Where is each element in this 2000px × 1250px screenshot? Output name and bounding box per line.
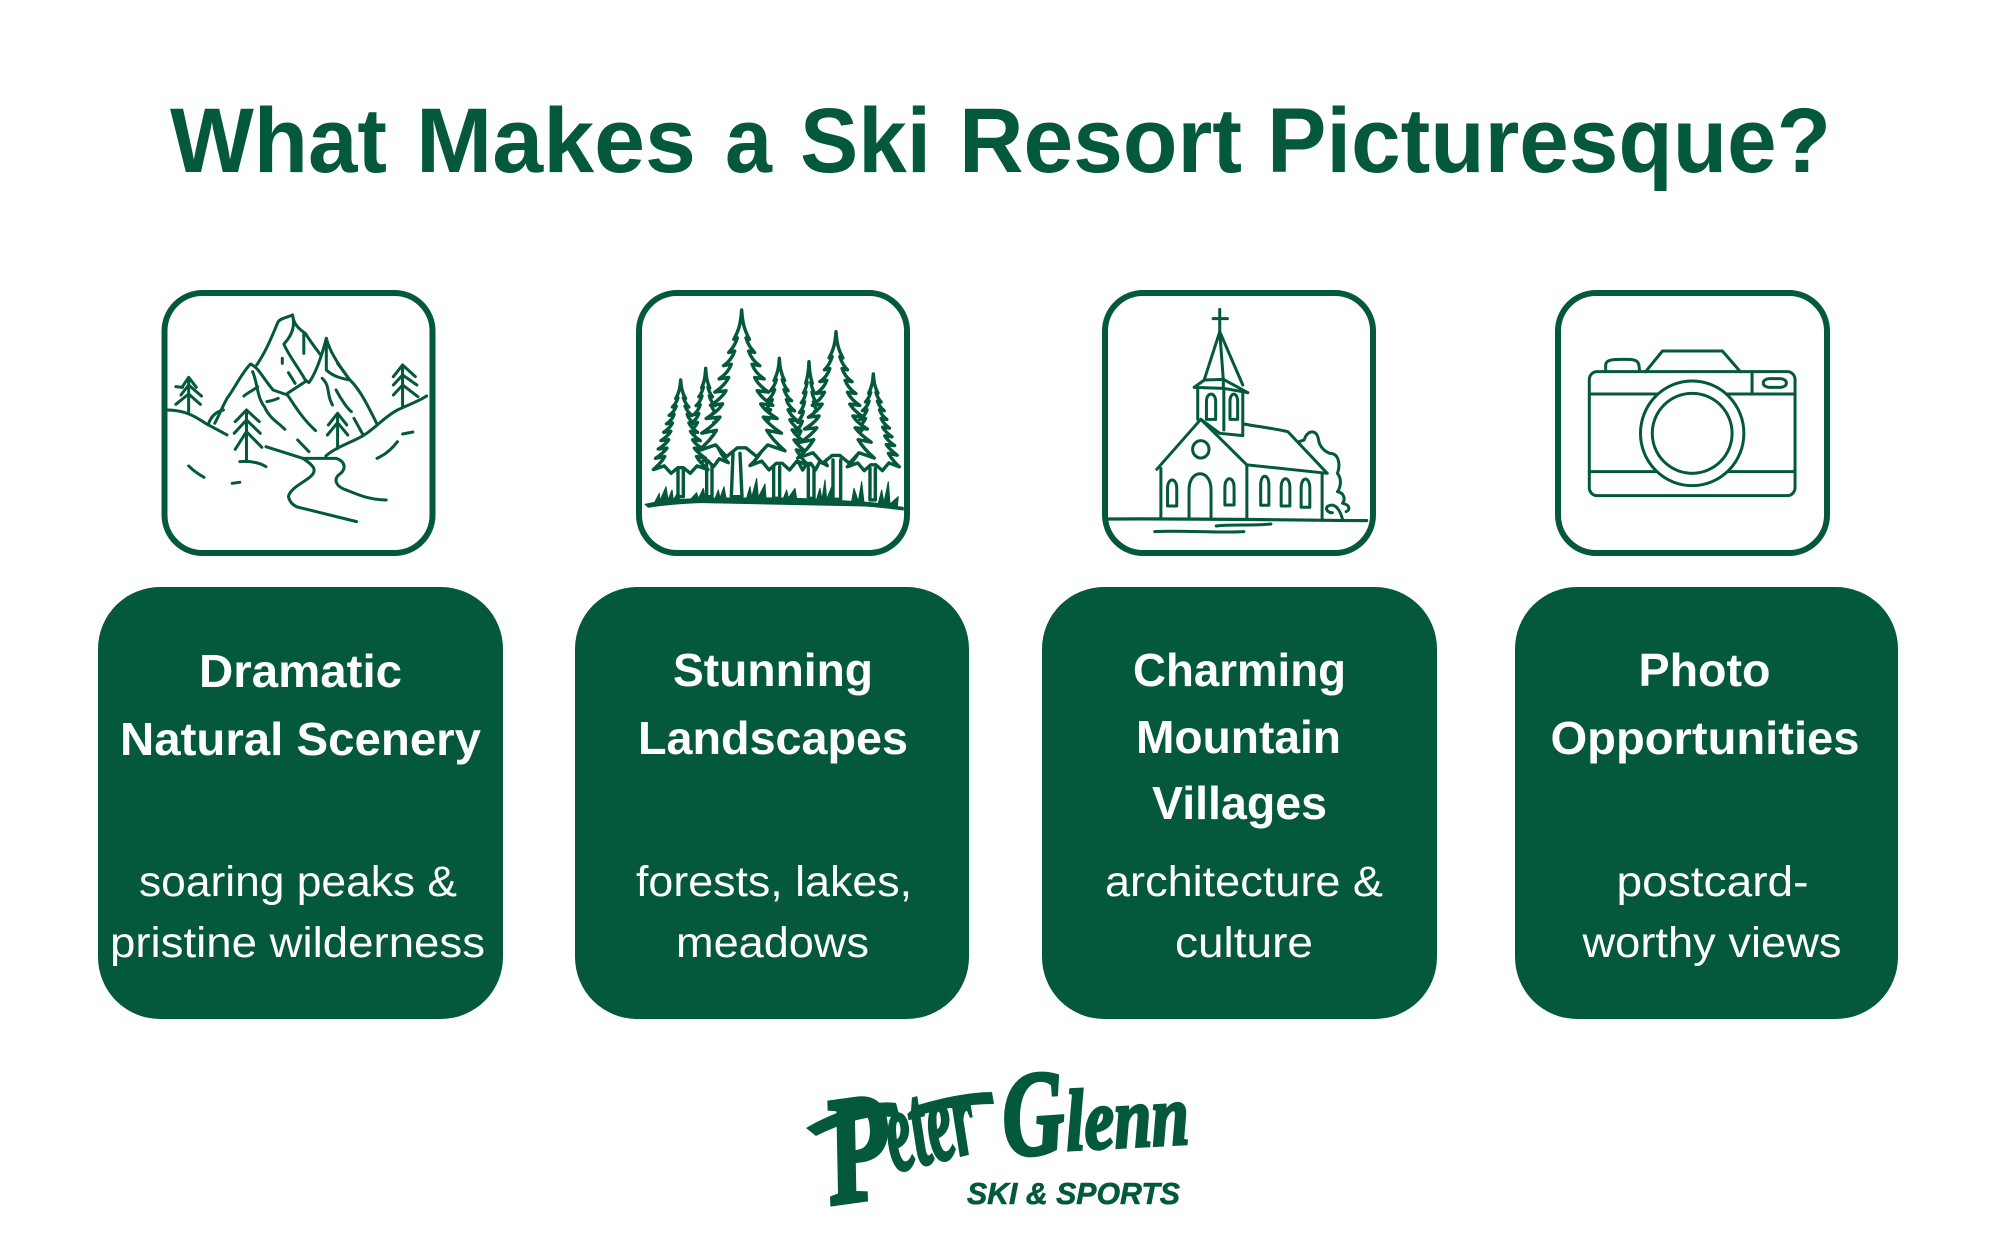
- title: a: [725, 90, 773, 192]
- panel: photo opportunities card: [1515, 587, 1898, 1019]
- panel: stunning landscapes card: Stunning: [673, 644, 873, 696]
- panel: charming mountain villages card: Mountain: [1136, 711, 1341, 763]
- panel: photo opportunities card: Photo: [1638, 644, 1770, 696]
- panel: dramatic natural scenery card: [98, 587, 503, 1019]
- panel: photo opportunities card: postcard-: [1616, 858, 1808, 906]
- panel: dramatic natural scenery card: Natural Scenery: [120, 713, 481, 765]
- panel: stunning landscapes card: [575, 587, 969, 1019]
- panel: photo opportunities card: worthy views: [1581, 919, 1842, 967]
- panel: stunning landscapes card: meadows: [676, 919, 869, 967]
- title: [170, 90, 1831, 192]
- panel: photo opportunities icon: [1558, 293, 1827, 553]
- logo: Peter Glenn Ski & Sports: lenn: [1063, 1067, 1191, 1169]
- panel: stunning landscapes card: Landscapes: [638, 712, 908, 764]
- title: Ski: [800, 90, 931, 192]
- logo: Peter Glenn Ski & Sports: P: [812, 1061, 902, 1238]
- panel: stunning landscapes icon: [639, 293, 907, 553]
- panel: charming mountain villages icon: [1105, 293, 1373, 553]
- panel: dramatic natural scenery card: Dramatic: [199, 645, 402, 697]
- logo: Peter Glenn Ski & Sports: [806, 1045, 1191, 1238]
- logo: Peter Glenn Ski & Sports: SKI & SPORTS: [967, 1176, 1180, 1211]
- panel: photo opportunities card: Opportunities: [1550, 712, 1860, 764]
- title: Makes: [416, 90, 696, 192]
- panel: charming mountain villages card: [1042, 587, 1437, 1019]
- logo: Peter Glenn Ski & Sports: G: [998, 1045, 1068, 1183]
- panel: stunning landscapes card: forests, lakes,: [636, 858, 912, 906]
- panel: dramatic natural scenery icon: [164, 293, 432, 553]
- panel: dramatic natural scenery card: soaring peaks &: [139, 858, 457, 906]
- title: What: [170, 90, 387, 192]
- panel: charming mountain villages card: culture: [1175, 919, 1313, 967]
- title: Picturesque?: [1267, 90, 1831, 192]
- panel: charming mountain villages card: Charming: [1133, 644, 1346, 696]
- panel: dramatic natural scenery card: pristine wilderness: [110, 919, 485, 967]
- logo: Peter Glenn Ski & Sports: eter: [869, 1049, 988, 1198]
- panel: charming mountain villages card: architecture &: [1105, 858, 1383, 906]
- panel: charming mountain villages card: Villages: [1152, 777, 1327, 829]
- title: Resort: [959, 90, 1242, 192]
